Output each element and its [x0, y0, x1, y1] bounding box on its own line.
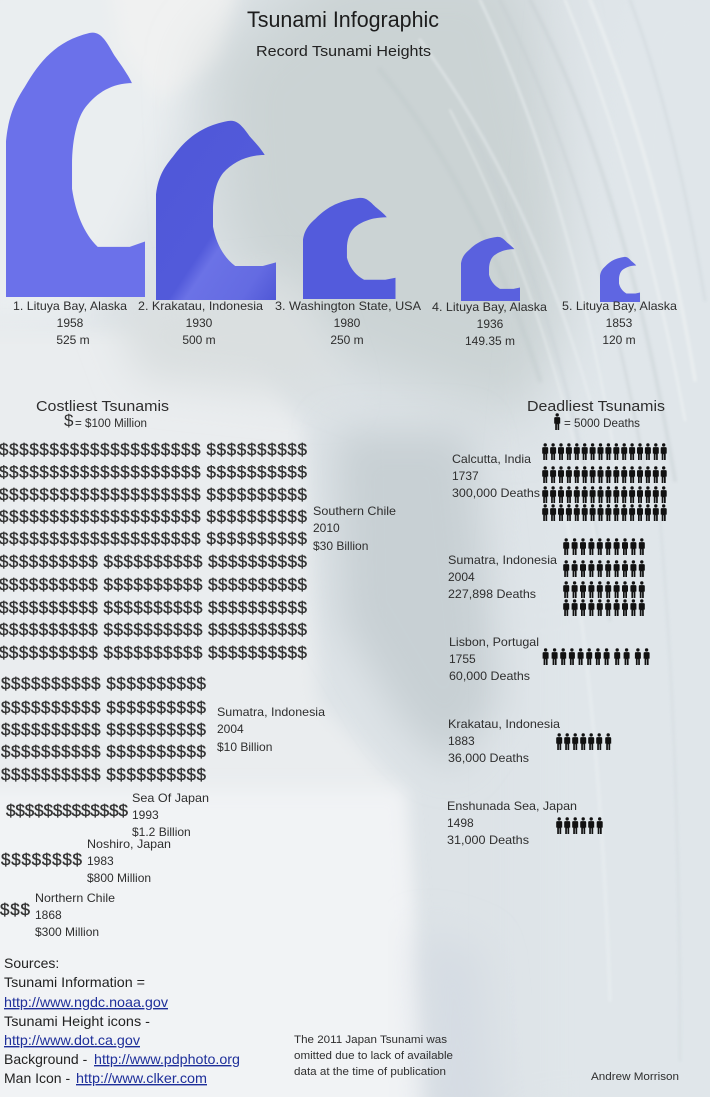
label: Enshunada: Enshunada Sea, Japan: [447, 799, 577, 813]
label: Noshiro: 1983: [87, 854, 114, 868]
label: Northern Chile: [35, 891, 115, 939]
dollar rows: Sumatra: [1, 674, 207, 784]
panel: costliest tsunamis: [0, 398, 396, 939]
dollar rows: Southern Chile: $$$$$$$$$$$$$$$$$$$$ $$$$$$$$$$: [0, 529, 308, 548]
sources: Tsunami Height icons -: [4, 1013, 150, 1029]
label: Lituya Bay 1958: [13, 299, 127, 347]
label: Krakatau deaths: Krakatau, Indonesia: [448, 717, 560, 731]
sources: http://www.clker.com: [76, 1070, 207, 1086]
label: Sumatra deaths: 227,898 Deaths: [448, 587, 536, 601]
label: Washington State 1980: 3. Washington State, USA: [275, 299, 421, 313]
label: Lisbon: Lisbon, Portugal: [449, 635, 539, 649]
label: Lituya Bay 1936: 149.35 m: [465, 334, 515, 348]
label: Krakatau 1930: 2. Krakatau, Indonesia: [138, 299, 263, 313]
label: Lituya Bay 1958: 525 m: [56, 333, 90, 347]
label: Lituya Bay 1958: 1958: [57, 316, 84, 330]
label: Lituya Bay 1958: 1. Lituya Bay, Alaska: [13, 299, 127, 313]
label: Sumatra cost: [217, 705, 325, 754]
legend: person key: = 5000 Deaths: [564, 416, 640, 430]
label: Enshunada: [447, 799, 577, 847]
dollar rows: Southern Chile: $$$$$$$$$$ $$$$$$$$$$ $$$$$$$$$$: [0, 598, 308, 617]
sources: Man Icon -: [4, 1070, 70, 1086]
sources: Background -: [4, 1051, 88, 1067]
label: Lituya Bay 1853: 1853: [606, 316, 633, 330]
dollar rows: Sumatra: $$$$$$$$$$ $$$$$$$$$$: [1, 674, 207, 693]
label: Enshunada: 31,000 Deaths: [447, 833, 529, 847]
dollar row: Northern Chile: $$$: [0, 900, 31, 919]
label: Calcutta: [452, 452, 540, 500]
title: Tsunami Infographic: [247, 7, 439, 32]
label: Lituya Bay 1936: [432, 300, 547, 348]
label: Southern Chile: Southern Chile: [313, 504, 396, 518]
dollar rows: Sumatra: $$$$$$$$$$ $$$$$$$$$$: [1, 720, 207, 739]
dollar rows: Southern Chile: $$$$$$$$$$ $$$$$$$$$$ $$$$$$$$$$: [0, 552, 308, 571]
pictogram: Lisbon: [543, 648, 650, 665]
label: Calcutta: 300,000 Deaths: [452, 486, 540, 500]
label: Lisbon: 60,000 Deaths: [449, 669, 530, 683]
pictogram: Krakatau: [556, 733, 611, 750]
sources: Tsunami Information =: [4, 974, 145, 990]
sources: http://www.ngdc.noaa.gov: [4, 994, 168, 1010]
label: Sea of Japan: Sea Of Japan: [132, 791, 209, 805]
heading: costliest: Costliest Tsunamis: [36, 398, 169, 415]
dollar rows: Southern Chile: [0, 440, 308, 662]
label: Washington State 1980: 1980: [334, 316, 361, 330]
legend: dollar key: = $100 Million: [75, 418, 147, 430]
icon: wave 5: [600, 257, 640, 302]
note: omitted 2011 tsunami: [294, 1034, 453, 1078]
icon: wave 4: [461, 237, 520, 301]
panel: deadliest tsunamis: [447, 398, 667, 847]
label: Northern Chile: $300 Million: [35, 925, 99, 939]
label: Washington State 1980: [275, 299, 421, 347]
label: Calcutta: Calcutta, India: [452, 452, 531, 466]
label: Sea of Japan: 1993: [132, 808, 159, 822]
label: Calcutta: 1737: [452, 469, 479, 483]
label: Krakatau deaths: 36,000 Deaths: [448, 751, 529, 765]
label: Lituya Bay 1853: 120 m: [602, 333, 636, 347]
sources: http://www.dot.ca.gov: [4, 1032, 140, 1048]
label: Lisbon: 1755: [449, 652, 476, 666]
panel: record tsunami heights: [6, 33, 677, 348]
sources: [4, 955, 240, 1086]
label: Southern Chile: $30 Billion: [313, 539, 368, 553]
dollar rows: Southern Chile: $$$$$$$$$$$$$$$$$$$$ $$$$$$$$$$: [0, 462, 308, 482]
legend: dollar key: [64, 411, 147, 430]
label: Sea of Japan: $1.2 Billion: [132, 825, 191, 839]
author credit: Andrew Morrison: [591, 1071, 679, 1083]
icon: wave 3: [303, 198, 396, 299]
pictogram: Sumatra: [563, 538, 645, 616]
dollar rows: Southern Chile: $$$$$$$$$$$$$$$$$$$$ $$$$$$$$$$: [0, 507, 308, 526]
label: Enshunada: 1498: [447, 816, 474, 830]
note: omitted 2011 tsunami: data at the time of publication: [294, 1066, 446, 1078]
label: Sumatra cost: 2004: [217, 722, 244, 736]
note: omitted 2011 tsunami: The 2011 Japan Tsunami was: [294, 1034, 448, 1046]
note: omitted 2011 tsunami: omitted due to lack of available: [294, 1050, 453, 1062]
label: Sumatra cost: Sumatra, Indonesia: [217, 705, 325, 719]
dollar rows: Sumatra: $$$$$$$$$$ $$$$$$$$$$: [1, 698, 207, 717]
label: Noshiro: Noshiro, Japan: [87, 837, 171, 851]
label: Noshiro: [87, 837, 171, 885]
icon: wave 2: [156, 121, 276, 300]
label: Sumatra deaths: 2004: [448, 570, 475, 584]
dollar rows: Southern Chile: $$$$$$$$$$ $$$$$$$$$$ $$$$$$$$$$: [0, 575, 308, 594]
label: Lituya Bay 1936: 4. Lituya Bay, Alaska: [432, 300, 547, 314]
dollar rows: Sumatra: $$$$$$$$$$ $$$$$$$$$$: [1, 742, 207, 761]
dollar row: Sea of Japan: $$$$$$$$$$$$$: [6, 801, 129, 820]
subtitle: Record Tsunami Heights: [256, 43, 431, 60]
label: Lituya Bay 1936: 1936: [477, 317, 504, 331]
label: Krakatau deaths: [448, 717, 560, 765]
sources: Sources:: [4, 955, 59, 971]
label: Lituya Bay 1853: [562, 299, 677, 347]
label: Northern Chile: 1868: [35, 908, 62, 922]
label: Sumatra deaths: [448, 553, 557, 601]
label: Lituya Bay 1853: 5. Lituya Bay, Alaska: [562, 299, 677, 313]
label: Krakatau deaths: 1883: [448, 734, 475, 748]
label: Noshiro: $800 Million: [87, 871, 151, 885]
label: Sumatra deaths: Sumatra, Indonesia: [448, 553, 557, 567]
heading: deadliest: Deadliest Tsunamis: [527, 398, 665, 415]
dollar rows: Southern Chile: $$$$$$$$$$ $$$$$$$$$$ $$$$$$$$$$: [0, 643, 308, 662]
dollar row: Noshiro: $$$$$$$$: [1, 850, 83, 869]
label: Krakatau 1930: 500 m: [182, 333, 216, 347]
label: Krakatau 1930: [138, 299, 263, 347]
label: Washington State 1980: 250 m: [330, 333, 364, 347]
label: Sea of Japan: [132, 791, 209, 839]
pictogram: Enshunada: [556, 817, 603, 834]
label: Sumatra cost: $10 Billion: [217, 740, 272, 754]
label: Lisbon: [449, 635, 539, 683]
label: Southern Chile: 2010: [313, 521, 340, 535]
dollar rows: Southern Chile: $$$$$$$$$$$$$$$$$$$$ $$$$$$$$$$: [0, 440, 308, 459]
dollar rows: Southern Chile: $$$$$$$$$$$$$$$$$$$$ $$$$$$$$$$: [0, 485, 308, 504]
pictogram: Calcutta: [542, 443, 667, 521]
label: Krakatau 1930: 1930: [186, 316, 213, 330]
legend: dollar key: $: [64, 411, 74, 430]
sources: http://www.pdphoto.org: [94, 1051, 240, 1067]
dollar rows: Southern Chile: $$$$$$$$$$ $$$$$$$$$$ $$$$$$$$$$: [0, 620, 308, 639]
icon: wave 1: [6, 33, 145, 297]
label: Northern Chile: Northern Chile: [35, 891, 115, 905]
label: Southern Chile: [313, 504, 396, 553]
dollar rows: Sumatra: $$$$$$$$$$ $$$$$$$$$$: [1, 765, 207, 784]
